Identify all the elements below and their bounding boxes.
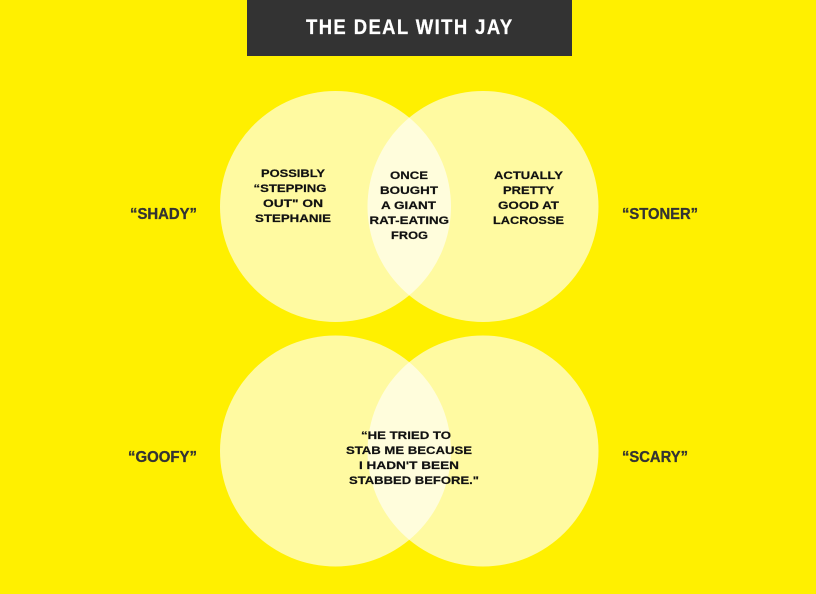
text: stoner only bbox=[493, 170, 564, 227]
text: overlap quote: STABBED BEFORE." bbox=[349, 475, 479, 487]
text: overlap: ONCE bbox=[390, 170, 428, 182]
label: shady: “SHADY” bbox=[130, 206, 197, 223]
text: shady only bbox=[254, 168, 331, 225]
venn diagram: shady and stoner bbox=[220, 91, 598, 322]
title: THE DEAL WITH JAY bbox=[306, 16, 514, 39]
text: stoner only: LACROSSE bbox=[493, 215, 564, 227]
text: overlap bbox=[370, 170, 449, 242]
circle: scary bbox=[368, 336, 598, 566]
text: stoner only: GOOD AT bbox=[498, 200, 560, 212]
text: overlap: RAT-EATING bbox=[370, 215, 449, 227]
text: overlap: A GIANT bbox=[381, 200, 437, 212]
venn diagram: goofy and scary bbox=[220, 336, 598, 566]
text: overlap: FROG bbox=[391, 230, 428, 242]
text: overlap quote: “HE TRIED TO bbox=[361, 430, 451, 442]
text: overlap: BOUGHT bbox=[380, 185, 439, 197]
circle: goofy bbox=[220, 336, 451, 566]
circle: stoner bbox=[368, 91, 598, 322]
label: goofy: “GOOFY” bbox=[128, 449, 197, 466]
text: overlap quote: I HADN'T BEEN bbox=[359, 460, 459, 472]
text: overlap quote: STAB ME BECAUSE bbox=[346, 445, 472, 457]
text: overlap quote bbox=[346, 430, 479, 487]
text: stoner only: PRETTY bbox=[503, 185, 554, 197]
circle: shady bbox=[220, 91, 451, 322]
text: stoner only: ACTUALLY bbox=[494, 170, 563, 182]
title bbox=[247, 0, 572, 56]
label: stoner: “STONER” bbox=[622, 206, 698, 223]
text: shady only: OUT" ON bbox=[263, 198, 323, 210]
text: shady only: POSSIBLY bbox=[261, 168, 325, 180]
text: shady only: STEPHANIE bbox=[255, 213, 331, 225]
label: scary: “SCARY” bbox=[622, 449, 688, 466]
text: shady only: “STEPPING bbox=[254, 183, 326, 195]
